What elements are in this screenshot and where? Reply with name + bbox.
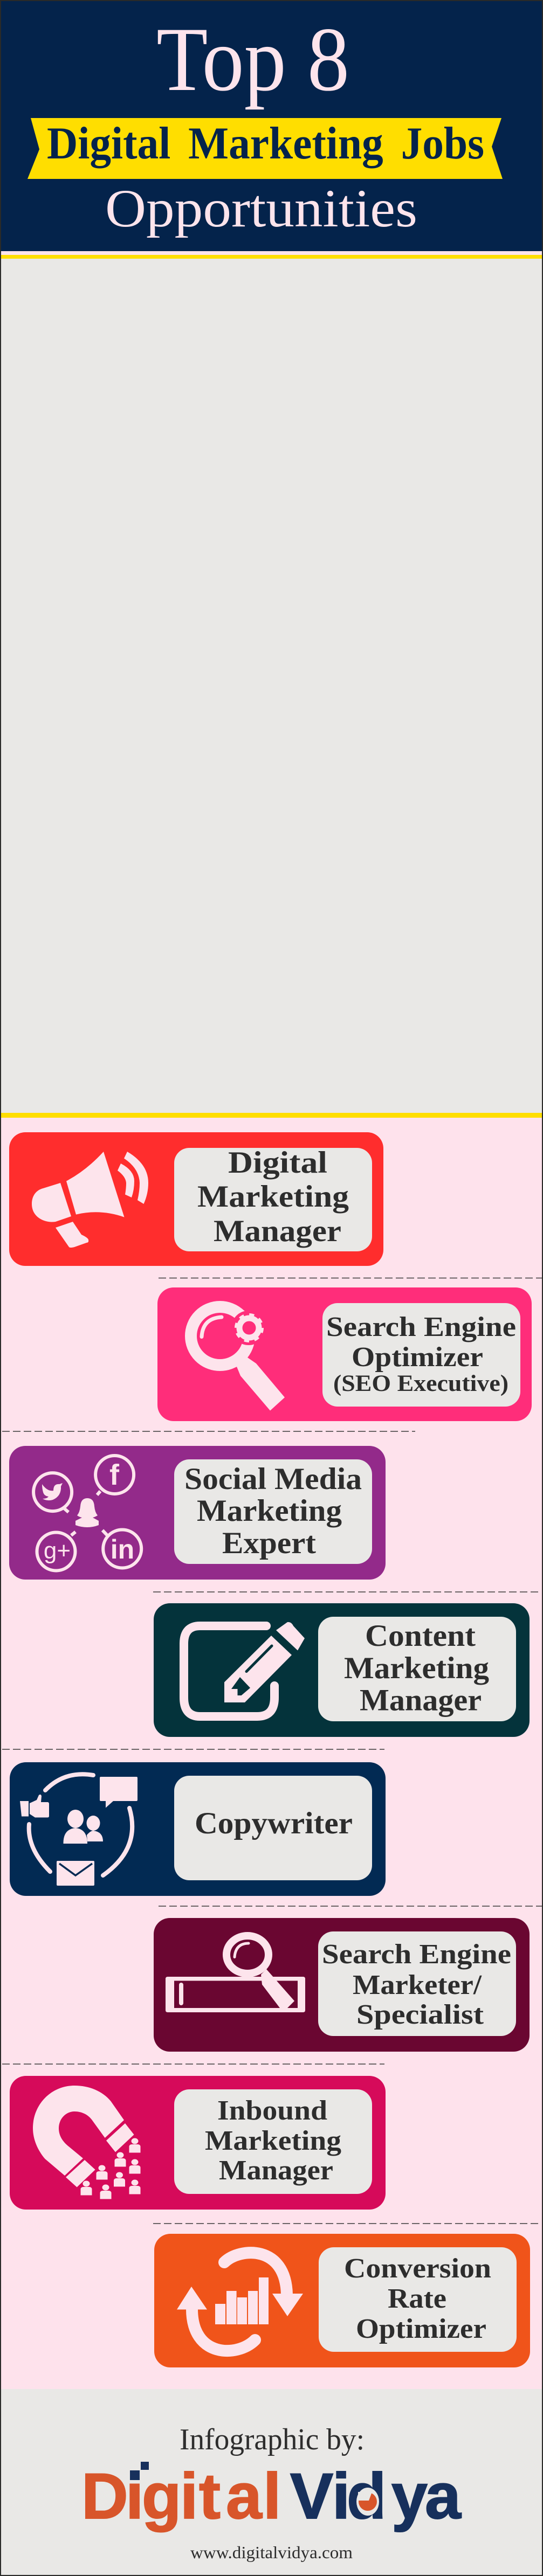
icon: magnet attracting people bbox=[33, 2086, 140, 2199]
card 6: Search Engine Marketer/Specialist bbox=[154, 1918, 530, 2052]
icon: conversion cycle with bars bbox=[177, 2253, 303, 2351]
label panel: Digital bbox=[228, 1146, 327, 1180]
label panel: Marketing bbox=[197, 1180, 349, 1214]
empty grey panel bbox=[1, 259, 542, 1113]
card 2: Search Engine Optimizer bbox=[157, 1287, 532, 1421]
label panel: Search Engine bbox=[326, 1312, 516, 1342]
icon: communication cycle bbox=[20, 1774, 138, 1886]
label panel bbox=[174, 1459, 372, 1564]
header panel bbox=[1, 1, 542, 259]
label panel bbox=[322, 1303, 520, 1407]
label panel: Rate bbox=[388, 2283, 446, 2314]
yellow ribbon banner bbox=[28, 118, 503, 179]
card 4: Content Marketing Manager bbox=[154, 1603, 530, 1737]
website url: www.digitalvidya.com bbox=[190, 2543, 353, 2562]
label panel bbox=[318, 1931, 516, 2036]
card 7: Inbound Marketing Manager bbox=[10, 2076, 386, 2210]
icon: megaphone bbox=[32, 1152, 148, 1248]
icon: social network bubbles: g+ bbox=[44, 1538, 71, 1564]
card 1: Digital Marketing Manager bbox=[9, 1132, 383, 1266]
label panel: Expert bbox=[222, 1526, 316, 1560]
card 5: Copywriter bbox=[10, 1762, 386, 1896]
card 8: Conversion Rate Optimizer bbox=[154, 2234, 530, 2367]
icon: social network bubbles: in bbox=[111, 1534, 134, 1564]
logo: Digital Vidya: Digital bbox=[81, 2460, 281, 2532]
label panel: Marketing bbox=[205, 2125, 341, 2156]
label panel: Marketing bbox=[344, 1651, 489, 1685]
label panel: Manager bbox=[219, 2155, 333, 2186]
label panel: Social Media bbox=[184, 1462, 362, 1496]
label panel: Conversion bbox=[344, 2253, 491, 2284]
icon: social network bubbles bbox=[33, 1456, 141, 1570]
label panel bbox=[174, 1776, 372, 1880]
label panel bbox=[174, 2089, 372, 2194]
title: Top 8: Top 8 bbox=[156, 9, 349, 110]
label panel: Copywriter bbox=[195, 1806, 353, 1840]
label panel: Inbound bbox=[217, 2095, 327, 2126]
label panel: Optimizer bbox=[352, 1342, 483, 1373]
logo: Digital Vidya: Vidya bbox=[290, 2460, 462, 2532]
label panel: Manager bbox=[214, 1214, 341, 1248]
footer panel bbox=[1, 2389, 542, 2575]
card 3: Social Media Marketing Expert bbox=[9, 1446, 386, 1580]
label panel: Optimizer bbox=[356, 2314, 486, 2344]
icon: social network bubbles: f bbox=[109, 1459, 120, 1491]
icon: pencil on pad bbox=[184, 1622, 305, 1716]
label panel: Marketer/ bbox=[353, 1970, 482, 2000]
credit line: Infographic by: bbox=[180, 2423, 365, 2456]
label panel: Search Engine bbox=[322, 1939, 511, 1970]
banner heading: Digital Marketing Jobs bbox=[47, 118, 484, 169]
logo: Digital Vidya bbox=[81, 2460, 462, 2532]
jobs section background bbox=[1, 1113, 542, 2389]
label panel: Marketing bbox=[197, 1494, 342, 1528]
label panel bbox=[319, 2247, 517, 2352]
label panel bbox=[174, 1146, 372, 1251]
label panel: Manager bbox=[360, 1684, 482, 1717]
label panel: Content bbox=[365, 1619, 476, 1653]
label panel bbox=[318, 1617, 516, 1721]
icon: magnifier with gear bbox=[191, 1307, 285, 1411]
title: Opportunities: Opportunities bbox=[105, 178, 417, 238]
icon: search bar with magnifier bbox=[166, 1936, 305, 2012]
label panel: Specialist bbox=[356, 1999, 484, 2030]
label panel: (SEO Executive) bbox=[333, 1371, 508, 1396]
